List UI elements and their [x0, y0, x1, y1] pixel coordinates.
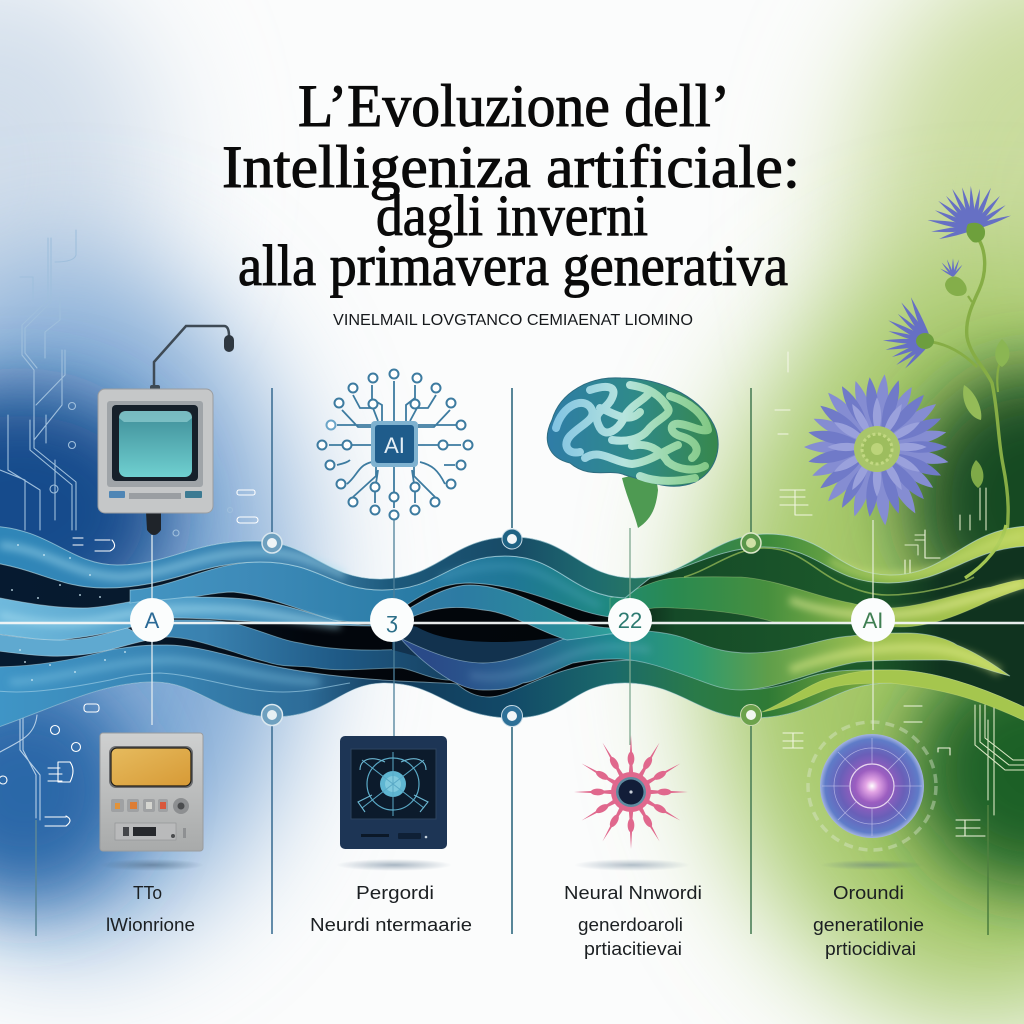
band: purple to lime (H): [400, 630, 1010, 690]
title: dagli inverni: [376, 183, 648, 248]
icon: vintage CRT terminal: [98, 326, 234, 535]
icon: brain: [547, 378, 718, 528]
wave ribbon: [0, 525, 1024, 730]
icon: dark monitor with neural graphic: [336, 736, 452, 871]
subtitle: VINELMAIL LOVGTANCO CEMIAENAT LIOMINO: [333, 312, 693, 329]
stem arc crossing ribbon: [965, 525, 1006, 578]
ribbon base dark: [0, 526, 1024, 730]
label column 2: Pergordi: [356, 883, 434, 903]
band: bottom: [0, 645, 1024, 730]
label column 3: Neural Nnwordi: [564, 883, 702, 903]
upper ring nodes: [262, 529, 761, 553]
title: [222, 73, 800, 298]
timeline marker 3: [370, 598, 414, 642]
icon: large cornflower: [804, 374, 950, 526]
label column 4: Oroundi: [833, 883, 904, 903]
label column 4: prtiocidivai: [825, 939, 916, 959]
label column 4: generatilonie: [813, 915, 924, 935]
band: central dark (G): [392, 625, 617, 669]
timeline marker 22: 22: [618, 608, 642, 633]
band: lime lower right: [762, 670, 1024, 725]
title: L’Evoluzione dell’: [298, 73, 730, 139]
band: left light below axis: [0, 628, 167, 656]
icon: AI chip neural tree: AI: [384, 433, 405, 458]
band: B: [130, 556, 625, 622]
label column 2: [310, 883, 472, 935]
timeline marker 22: [608, 598, 652, 642]
ribbon sheen: [0, 536, 1024, 682]
label column 3: [564, 883, 702, 959]
vertical divider lines: [36, 388, 988, 936]
icon: beige control unit: [100, 733, 204, 871]
band: fat green: [610, 577, 1024, 627]
label column 3: generdoaroli: [578, 915, 683, 935]
band: top: [0, 526, 1024, 598]
band: thin lime accent under top band: [684, 548, 974, 595]
band: left lower seam: [0, 673, 350, 692]
star dust on left of ribbon: [11, 544, 126, 681]
label column 4: [813, 883, 924, 959]
label column 3: prtiacitievai: [584, 939, 682, 959]
decorative circuit traces right: [775, 352, 1024, 836]
title: alla primavera generativa: [238, 233, 788, 298]
label column 1: TTo: [133, 883, 162, 903]
timeline marker A: A: [145, 608, 160, 633]
icon: flowering stem: [883, 186, 1012, 560]
timeline marker 3: ʒ: [386, 608, 398, 633]
timeline axis: [0, 622, 1024, 624]
timeline marker AI: AI: [863, 608, 883, 633]
band: C light ribbon: [0, 585, 640, 640]
icon: glowing sphere: [808, 722, 936, 870]
title: Intelligeniza artificiale:: [222, 134, 800, 200]
icon: pink neuron: [574, 735, 690, 871]
icon: AI chip neural tree: [318, 370, 472, 520]
label column 1: [106, 883, 195, 935]
timeline marker AI: [851, 598, 895, 642]
decorative circuit traces left: [0, 230, 258, 826]
label column 2: Neurdi ntermaarie: [310, 915, 472, 935]
lower ring nodes: [262, 704, 762, 726]
band: lower middle (D): [166, 620, 450, 680]
label column 1: lWionrione: [106, 915, 195, 935]
timeline marker A: [130, 598, 174, 642]
